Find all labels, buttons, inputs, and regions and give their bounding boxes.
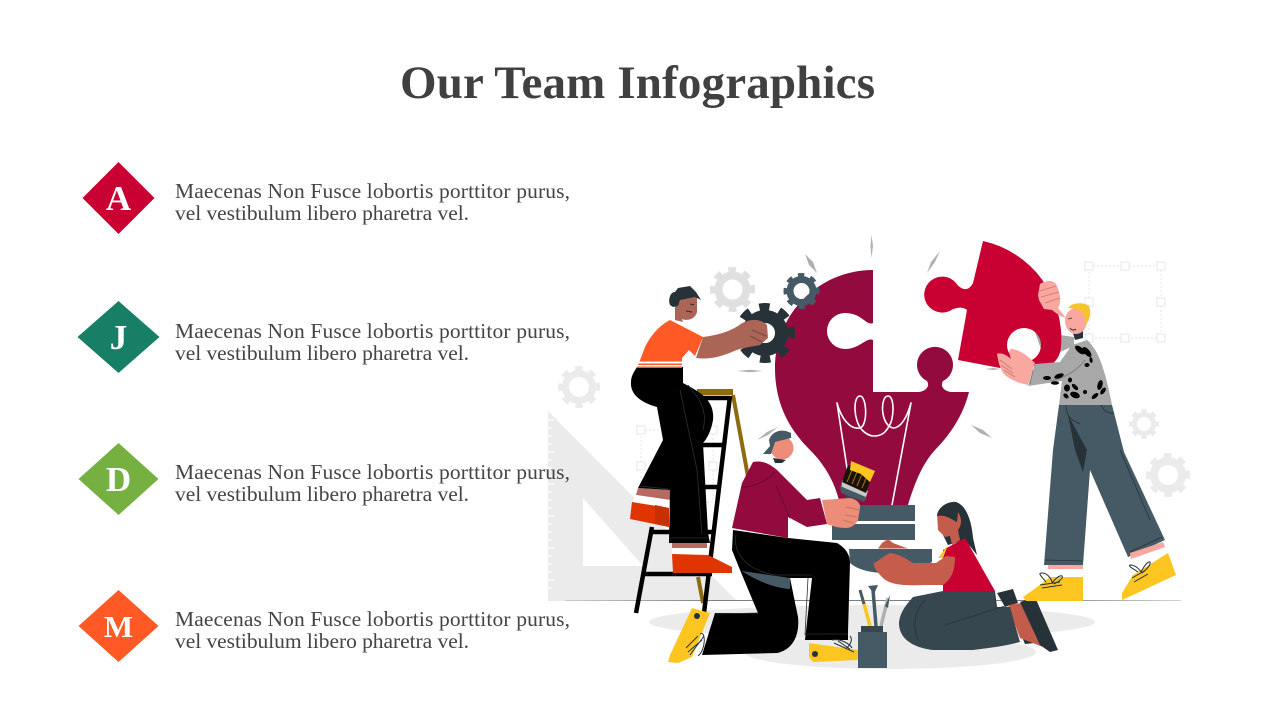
text D: Maecenas Non Fusce lobortis porttitor purus, [175,460,570,484]
gear dark [740,308,790,358]
pencil cup [858,585,890,668]
diamond M [78,590,158,662]
shirt [637,320,703,368]
paint brush [840,461,875,506]
gear light [714,270,752,308]
text A [175,179,570,225]
diamond D [78,443,158,515]
hand [822,498,860,528]
background gears [562,370,1186,493]
arm [874,553,955,585]
hoodie [732,461,827,538]
puzzle piece [924,241,1061,368]
illustration [548,235,1186,669]
diamond J: J [110,318,127,357]
right shoe [809,643,858,662]
lower hand [997,349,1035,385]
rear foot [636,488,670,500]
head [770,436,794,460]
item A [82,162,570,234]
text J: Maecenas Non Fusce lobortis porttitor purus, [175,319,570,343]
text M [175,607,570,653]
diamond M: M [104,609,133,644]
wireframe squares left [637,426,717,502]
diamond A [82,162,154,234]
cuffs [1048,542,1165,569]
text D [175,460,570,506]
shoes [1023,553,1176,601]
person: man on ladder [630,286,768,573]
head [1065,308,1087,334]
light bulb puzzle [775,270,969,507]
ground line [565,600,1181,601]
text M: vel vestibulum libero pharetra vel. [175,629,469,653]
neck [1073,331,1083,340]
floor shadows [649,605,1095,669]
text J: vel vestibulum libero pharetra vel. [175,341,469,365]
diamond D: D [106,460,131,499]
diamond A: A [106,179,132,218]
back hand [878,539,908,548]
background set square [548,411,737,601]
trousers [1044,405,1165,565]
sparkle rays [737,235,1001,440]
trousers [899,591,1020,650]
person: man with puzzle [997,281,1176,601]
diamond J [78,301,160,373]
face [937,510,961,545]
item D [78,443,570,515]
ladder [636,389,749,613]
person: kneeling painter [668,431,860,663]
text D: vel vestibulum libero pharetra vel. [175,482,469,506]
text A: Maecenas Non Fusce lobortis porttitor purus, [175,179,570,203]
arm and hand [696,320,768,359]
trousers [702,530,850,655]
text J [175,319,570,365]
text A: vel vestibulum libero pharetra vel. [175,201,469,225]
text M: Maecenas Non Fusce lobortis porttitor purus, [175,607,570,631]
item M [78,590,570,662]
front foot [672,543,707,548]
head [675,296,697,322]
title: Our Team Infographics [400,57,875,109]
filament [837,396,911,507]
shirt [943,538,995,591]
trousers [631,367,713,543]
hair back [937,502,977,555]
person: seated woman [874,502,1058,652]
gear slate [786,276,817,306]
bulb base [832,505,932,573]
left shoe [668,608,710,663]
sweater spots [1043,344,1107,400]
item J [78,301,570,373]
back sleeve of puzzle man [1035,332,1074,352]
sweater with arm [1028,340,1112,405]
shoes and foot [997,589,1018,607]
wireframe squares right [1085,262,1165,342]
upper hand [1038,281,1066,318]
